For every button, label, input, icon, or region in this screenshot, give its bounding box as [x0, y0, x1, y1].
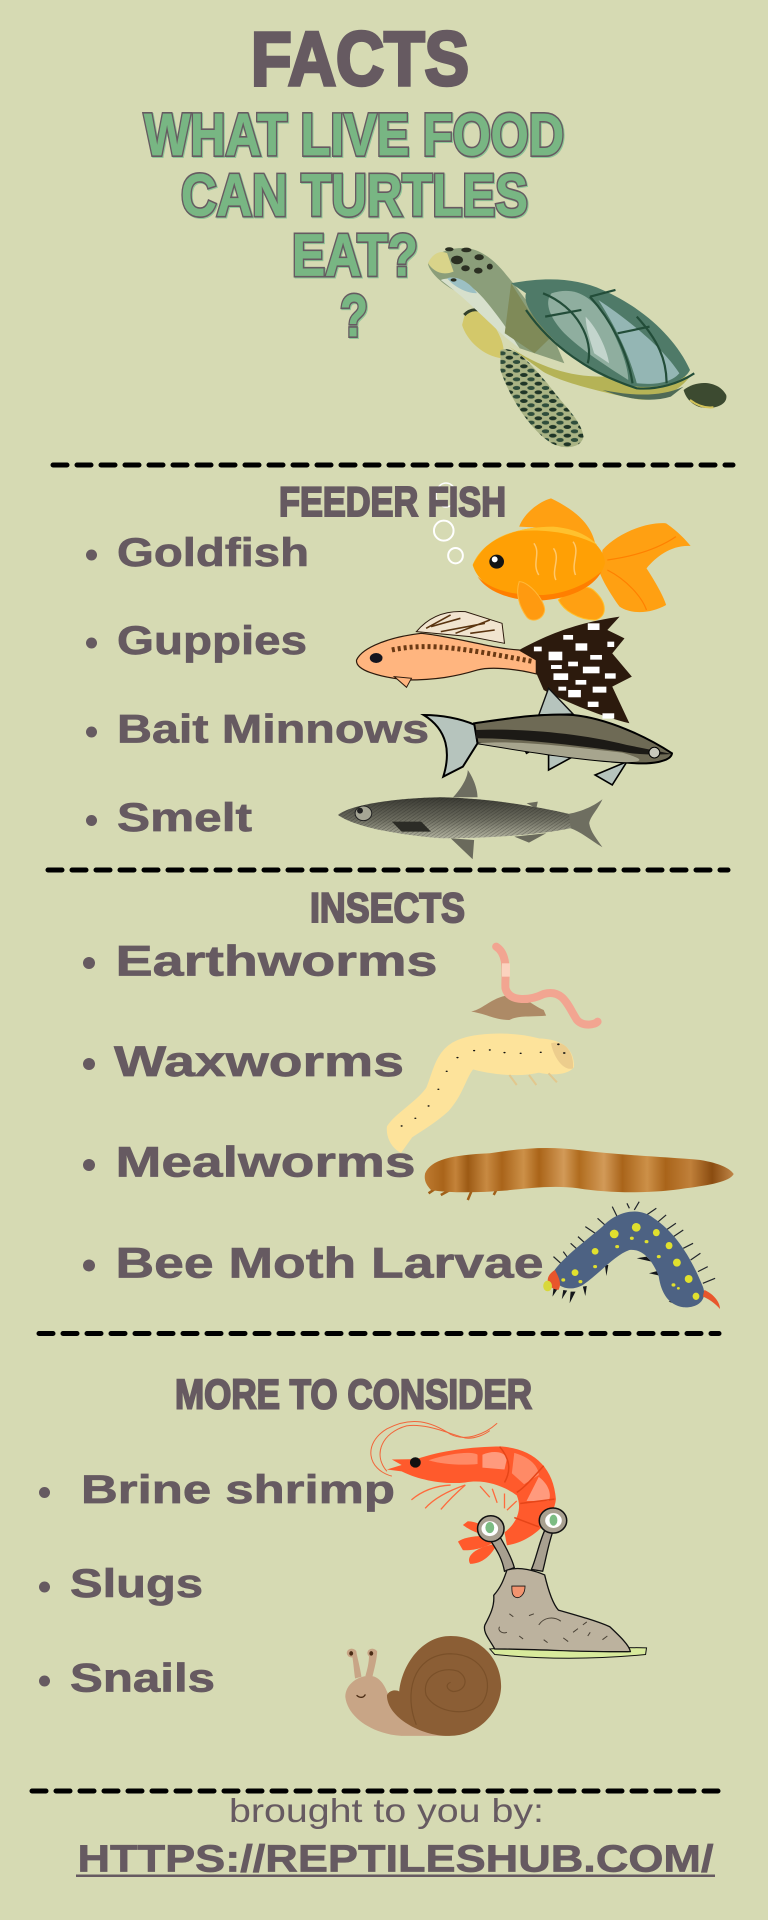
icon: waxworm: [388, 1035, 573, 1152]
list: more to consider: [39, 1468, 395, 1700]
subtitle: what live food can turtles eat: CAN TURTLES: [181, 162, 528, 228]
list: feeder fish: [86, 531, 429, 840]
title: FACTS: [251, 17, 469, 102]
list: more to consider: Brine shrimp: [81, 1468, 395, 1512]
heading: feeder fish: FEEDER FISH: [279, 478, 506, 525]
subtitle: what live food can turtles eat: EAT?: [292, 222, 418, 288]
icon: sea turtle: [428, 247, 726, 447]
heading: more to consider: MORE TO CONSIDER: [175, 1370, 532, 1418]
list: feeder fish: Goldfish: [117, 531, 309, 575]
list: insects: Earthworms: [116, 938, 438, 986]
icon: bait minnow: [424, 688, 672, 785]
subtitle: what live food can turtles eat: EAT?: [292, 222, 418, 288]
divider: [53, 462, 733, 468]
list: more to consider: Snails: [70, 1656, 215, 1700]
list: insects: Waxworms: [114, 1038, 404, 1086]
list: insects: [83, 938, 544, 1288]
list: insects: Bee Moth Larvae: [116, 1240, 544, 1288]
icon: mealworm: [425, 1148, 734, 1200]
panel: insects: [83, 884, 734, 1309]
divider: [39, 1331, 719, 1336]
subtitle: what live food can turtles eat: WHAT LIVE FOOD: [144, 102, 564, 168]
panel: more to consider: [39, 1370, 647, 1736]
divider: [32, 1788, 718, 1794]
divider: [48, 868, 728, 872]
subtitle: what live food can turtles eat: WHAT LIVE FOOD: [145, 103, 565, 169]
panel: feeder fish: [86, 478, 691, 859]
icon: smelt: [338, 770, 602, 859]
icon: shrimp: [371, 1421, 556, 1564]
footer: website link: HTTPS://REPTILESHUB.COM/: [78, 1838, 714, 1880]
subtitle: what live food can turtles eat: [144, 102, 565, 350]
subtitle: what live food can turtles eat: CAN TURTLES: [182, 164, 529, 230]
list: insects: Mealworms: [116, 1138, 416, 1186]
list: feeder fish: Smelt: [117, 796, 252, 840]
icon: top bubble: [436, 483, 456, 507]
list: feeder fish: Bait Minnows: [117, 708, 429, 752]
icon: snail: [345, 1636, 501, 1736]
icon: earthworm: [471, 947, 598, 1025]
icon: guppy: [357, 611, 632, 723]
footer: brought to you by: brought to you by:: [229, 1792, 544, 1829]
subtitle: what live food can turtles eat: ?: [340, 283, 368, 349]
icon: slug: [478, 1508, 647, 1658]
icon: bee moth larva: [543, 1202, 720, 1309]
subtitle: what live food can turtles eat: ?: [340, 283, 368, 349]
subtitle: what live food can turtles eat: EAT?: [293, 224, 419, 290]
list: feeder fish: Guppies: [117, 619, 307, 663]
subtitle: what live food can turtles eat: WHAT LIVE FOOD: [144, 102, 564, 168]
subtitle: what live food can turtles eat: ?: [341, 284, 369, 350]
icon: goldfish: [434, 498, 691, 620]
heading: insects: INSECTS: [310, 884, 465, 931]
subtitle: what live food can turtles eat: CAN TURTLES: [181, 162, 528, 228]
list: more to consider: Slugs: [70, 1562, 203, 1606]
